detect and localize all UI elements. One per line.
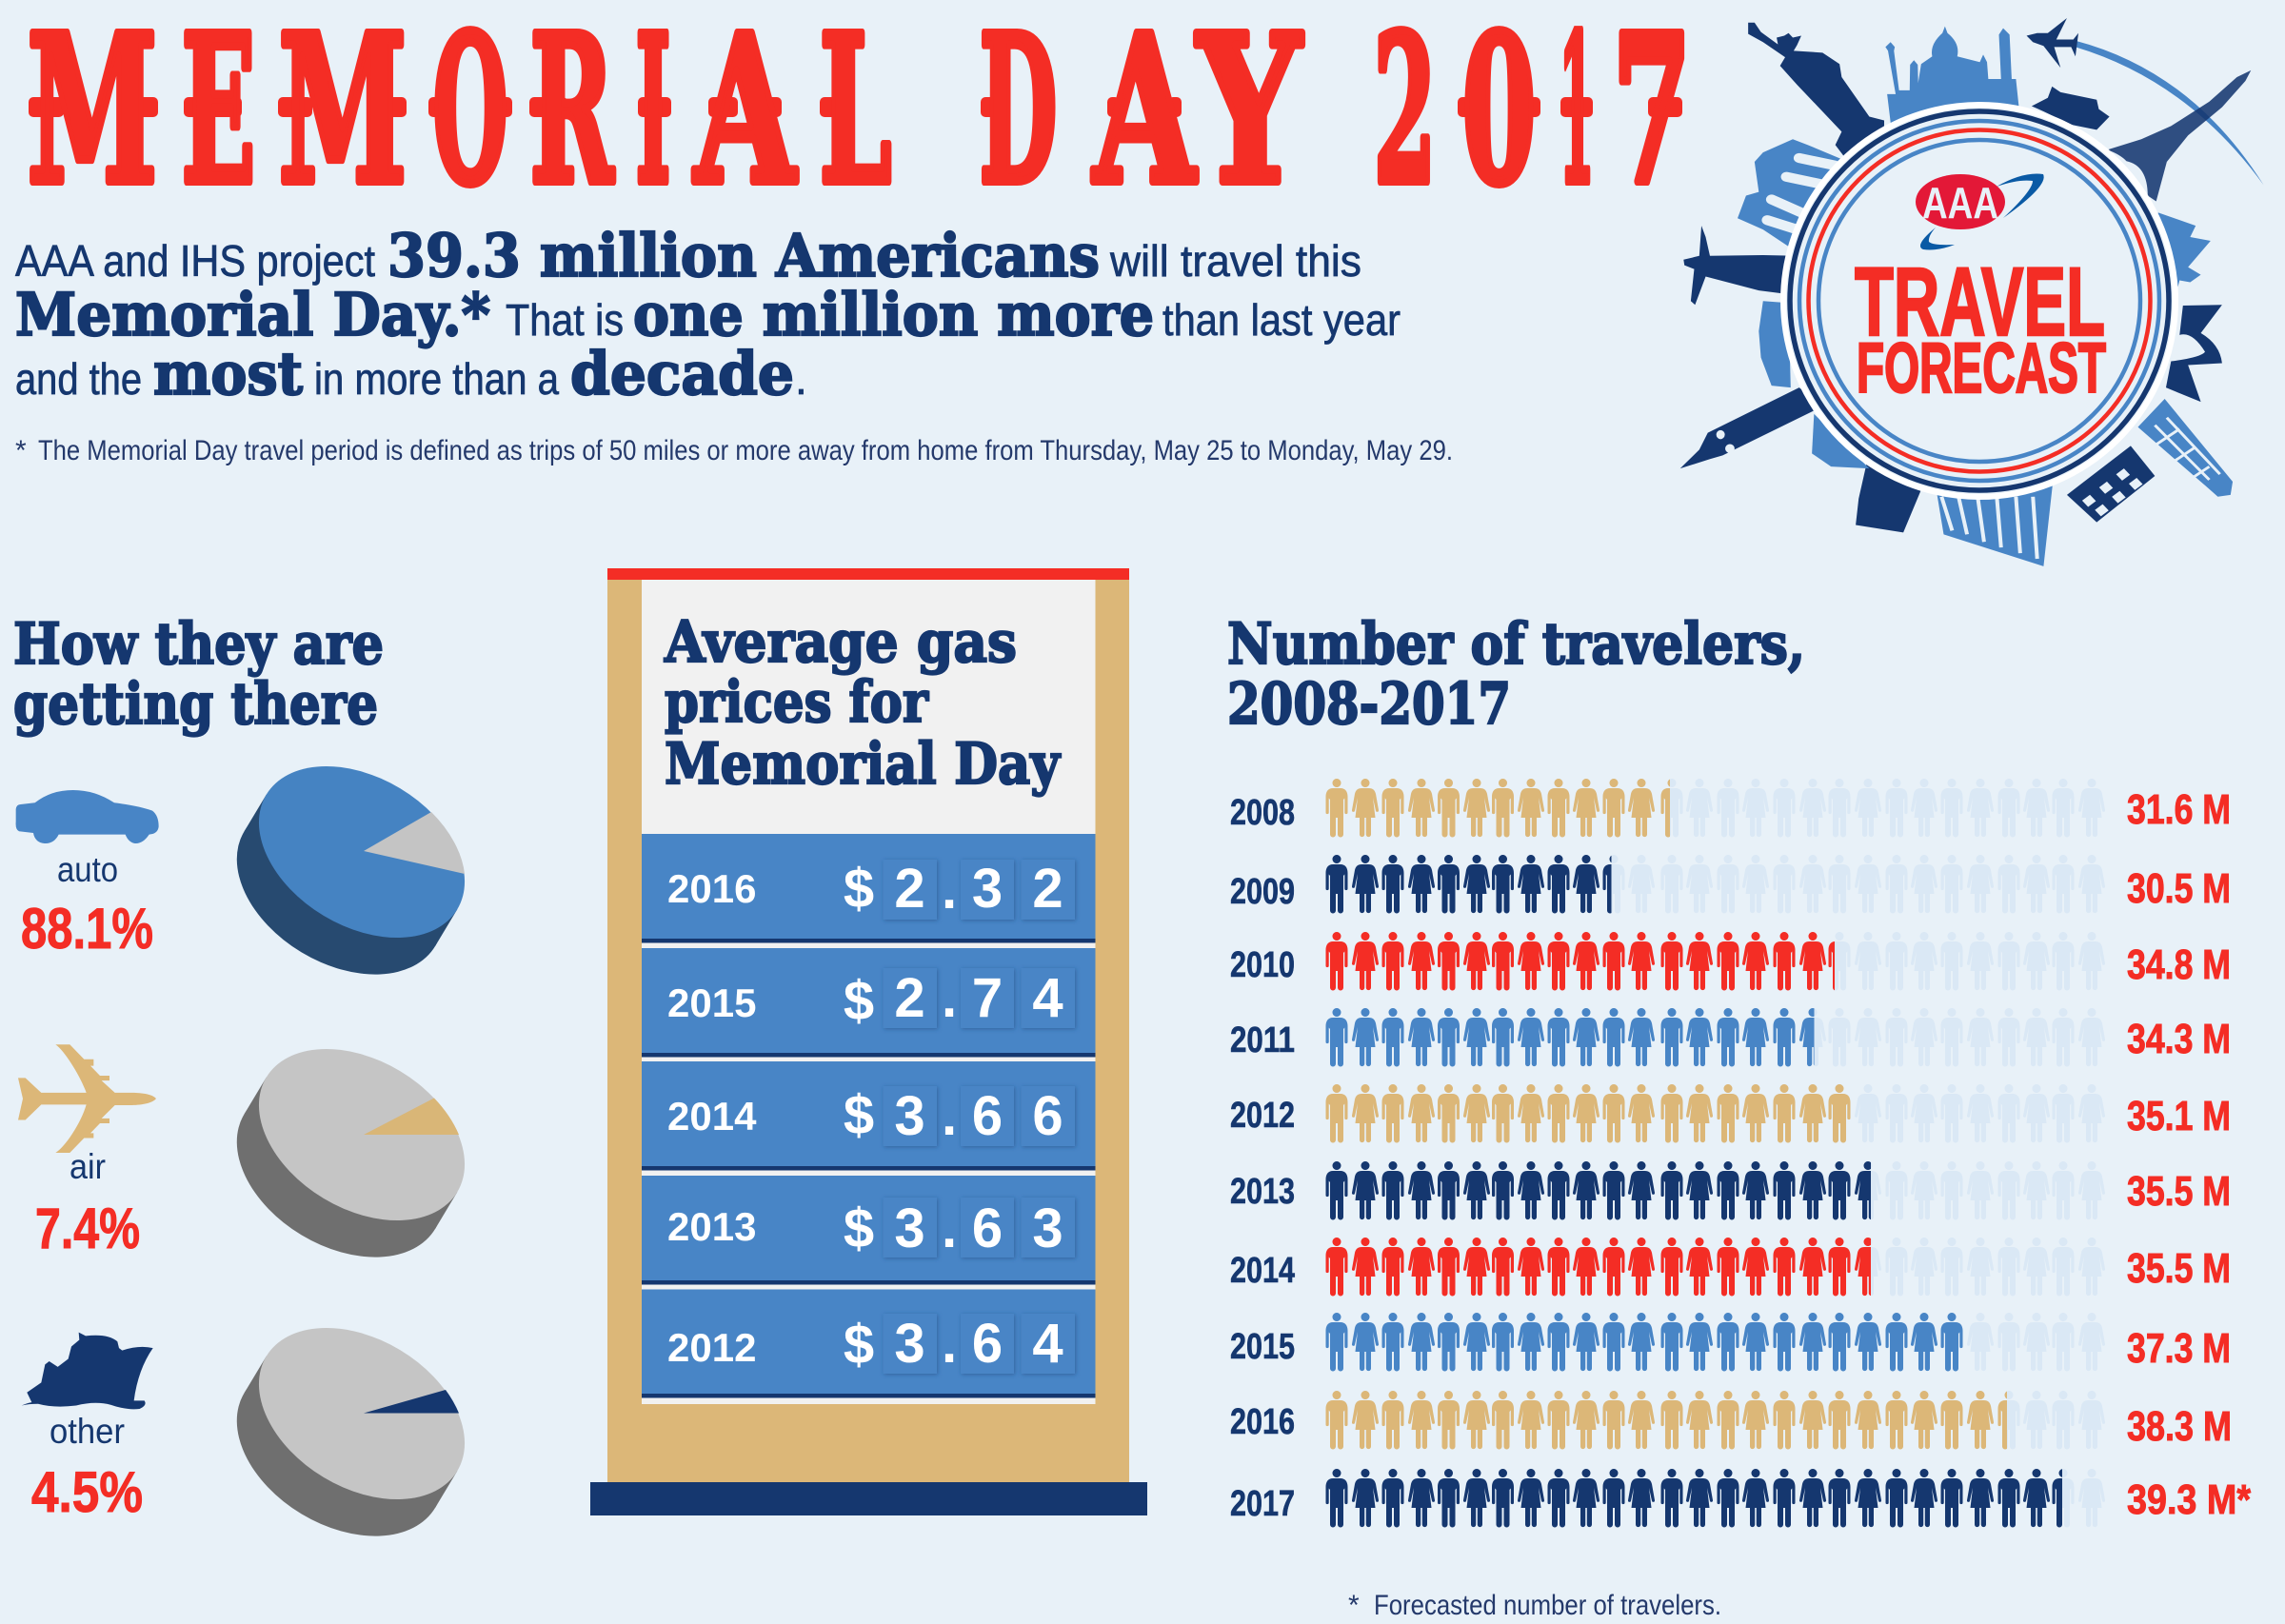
footnote: forecasted: Forecasted number of travelers. [1374,1590,1721,1621]
price row 2015: 7 [972,967,1003,1029]
badge rings [1783,105,2176,497]
intro text block: decade [570,339,794,408]
price row 2012: 3 [894,1313,925,1375]
row 2008: 2008 [1230,793,1295,833]
price row 2013 [642,1176,1095,1285]
price row 2016: 2 [894,858,925,920]
price row 2016: $ [844,858,874,920]
row 2008: 31.6 M [2127,786,2231,833]
price row 2012: 2012 [667,1325,756,1370]
price row 2013: 3 [1032,1198,1063,1259]
price row 2012: $ [844,1314,874,1376]
price row 2012: 6 [972,1313,1003,1375]
footnote: travel period: * [15,435,27,466]
heading: 2008-2017 [1227,671,1511,738]
pie chart: auto 88.1% [206,731,495,1010]
price row 2015: $ [844,970,874,1032]
value: air share: 7.4% [35,1197,140,1260]
row 2010: 34.8 M [2127,941,2231,988]
label: other: other [50,1412,125,1451]
intro text block: most [153,339,303,408]
badge text: forecast: FORECAST [1857,328,2106,407]
intro text block: Memorial Day.* [15,280,490,349]
intro text block: That is [506,295,624,345]
price row 2014 [642,1061,1095,1171]
heading: Number of travelers, [1227,611,1805,678]
row 2017: 2017 [1230,1484,1295,1524]
row 2012: 2012 [1230,1096,1295,1136]
row 2015 [1230,1313,2231,1372]
row 2014: 35.5 M [2127,1245,2231,1292]
row 2014: 2014 [1230,1251,1295,1291]
price row 2013: 3 [894,1198,925,1259]
heading [664,609,1062,798]
row 2009: 30.5 M [2127,865,2231,912]
icon: airplane [18,1044,156,1153]
price row 2014: $ [844,1084,874,1146]
price row 2015: . [942,967,957,1029]
intro text block [15,221,1401,408]
icon: cruise ship [22,1333,153,1409]
badge text: travel: TRAVEL [1855,248,2105,356]
AAA logo [1916,174,2044,249]
row 2013: 35.5 M [2127,1168,2231,1215]
price row 2014: 2014 [667,1094,757,1139]
intro text block: will travel this [1109,236,1361,286]
title [27,0,1691,230]
row 2013 [1230,1161,2231,1220]
row 2012: 35.1 M [2127,1093,2231,1139]
row 2016: 38.3 M [2127,1403,2232,1450]
row 2010: 2010 [1230,945,1295,985]
sign base [590,1482,1147,1515]
intro text block: 39.3 million Americans [387,221,1100,290]
price row 2015: 4 [1032,967,1063,1029]
row 2013: 2013 [1230,1172,1295,1212]
panel: how they are getting there [13,611,495,1572]
heading: prices for [665,669,929,736]
landmarks ring [1680,18,2264,566]
price row 2015 [642,948,1095,1057]
pie chart: air 7.4% [206,1014,495,1293]
price row 2014: . [942,1085,957,1147]
sign face [642,580,1095,1404]
row 2009 [1230,855,2231,914]
value: auto share: 88.1% [21,897,153,961]
footnote: travel period: The Memorial Day travel period is defined as trips of 50 miles or more away from home from Thursday, May 25 to Monday, May 29. [38,435,1453,466]
intro text block: and the [15,354,142,404]
intro text block: AAA and IHS project [15,236,375,286]
intro text block: . [795,354,807,404]
row 2011: 34.3 M [2127,1016,2231,1062]
price row 2015: 2 [894,967,925,1029]
price row 2014: 6 [972,1085,1003,1147]
row 2008 [1230,779,2231,838]
label: air: air [70,1147,106,1186]
value: other share: 4.5% [31,1460,143,1524]
price row 2014: 6 [1032,1085,1063,1147]
intro text block: in more than a [314,354,559,404]
price row 2012 [642,1289,1095,1397]
label: auto: auto [57,850,118,889]
icon: car [16,790,159,843]
price row 2016 [642,834,1095,942]
price row 2013: 6 [972,1198,1003,1259]
heading [1227,611,1805,738]
heading: getting there [13,671,378,738]
row 2016: 2016 [1230,1402,1295,1442]
row 2015: 37.3 M [2127,1325,2231,1372]
price row 2012: . [942,1313,957,1375]
badge: AAA travel forecast with world landmarks [1680,18,2264,566]
row 2017: 39.3 M* [2127,1476,2252,1523]
price row 2016: 2 [1032,858,1063,920]
footnote: forecasted: * [1348,1590,1360,1621]
row 2014 [1230,1238,2231,1297]
price row 2013: 2013 [667,1204,756,1249]
pie chart: other 4.5% [206,1293,495,1572]
price row 2016: 2016 [667,866,756,911]
sign frame [607,571,1129,1482]
intro text block: than last year [1162,295,1401,345]
row 2011: 2011 [1230,1020,1295,1060]
AAA logo: AAA [1922,178,1998,228]
sign top bar [607,568,1129,580]
intro text block: one million more [633,280,1154,349]
price row 2014: 3 [894,1085,925,1147]
heading: How they are [13,611,384,678]
row 2011 [1230,1008,2231,1066]
price row 2016: 3 [972,858,1003,920]
row 2015: 2015 [1230,1327,1295,1367]
row 2009: 2009 [1230,872,1295,912]
price row 2016: . [942,859,957,921]
price row 2012: 4 [1032,1313,1063,1375]
heading: Memorial Day [665,731,1062,798]
row 2017 [1230,1469,2252,1527]
panel: gas price sign [590,568,1147,1515]
heading [13,611,384,738]
row 2016 [1230,1391,2232,1450]
panel: number of travelers [1227,611,2252,1621]
row 2012 [1230,1084,2231,1142]
price row 2013: $ [844,1198,874,1259]
heading: Average gas [664,609,1017,676]
row 2010 [1230,932,2231,990]
price row 2013: . [942,1198,957,1259]
price row 2015: 2015 [667,980,756,1025]
